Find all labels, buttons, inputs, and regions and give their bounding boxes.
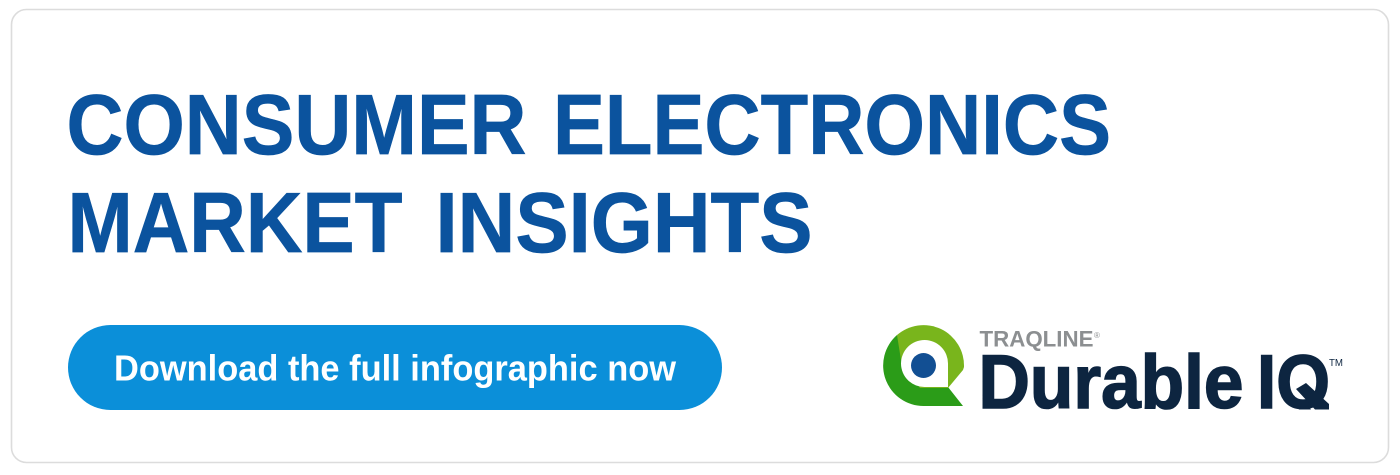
trademark: TM bbox=[1329, 358, 1343, 369]
title: CONSUMER bbox=[66, 78, 526, 173]
logo: Durable IQ bbox=[883, 325, 1342, 410]
title: MARKET bbox=[68, 176, 402, 271]
icon: location ring bbox=[883, 325, 964, 406]
wordmark: IQ: IQ bbox=[1257, 340, 1330, 425]
title: INSIGHTS bbox=[436, 176, 812, 271]
title bbox=[66, 78, 1111, 271]
wordmark: Durable: Durable bbox=[978, 340, 1244, 425]
button: download: Download the full infographic now bbox=[114, 348, 677, 388]
button: download bbox=[68, 325, 722, 410]
wordmark: IQ bbox=[1260, 354, 1329, 410]
registered mark: ® bbox=[1094, 331, 1100, 340]
wordmark: TRAQLINE: TRAQLINE bbox=[980, 326, 1094, 352]
title: ELECTRONICS bbox=[553, 78, 1111, 173]
